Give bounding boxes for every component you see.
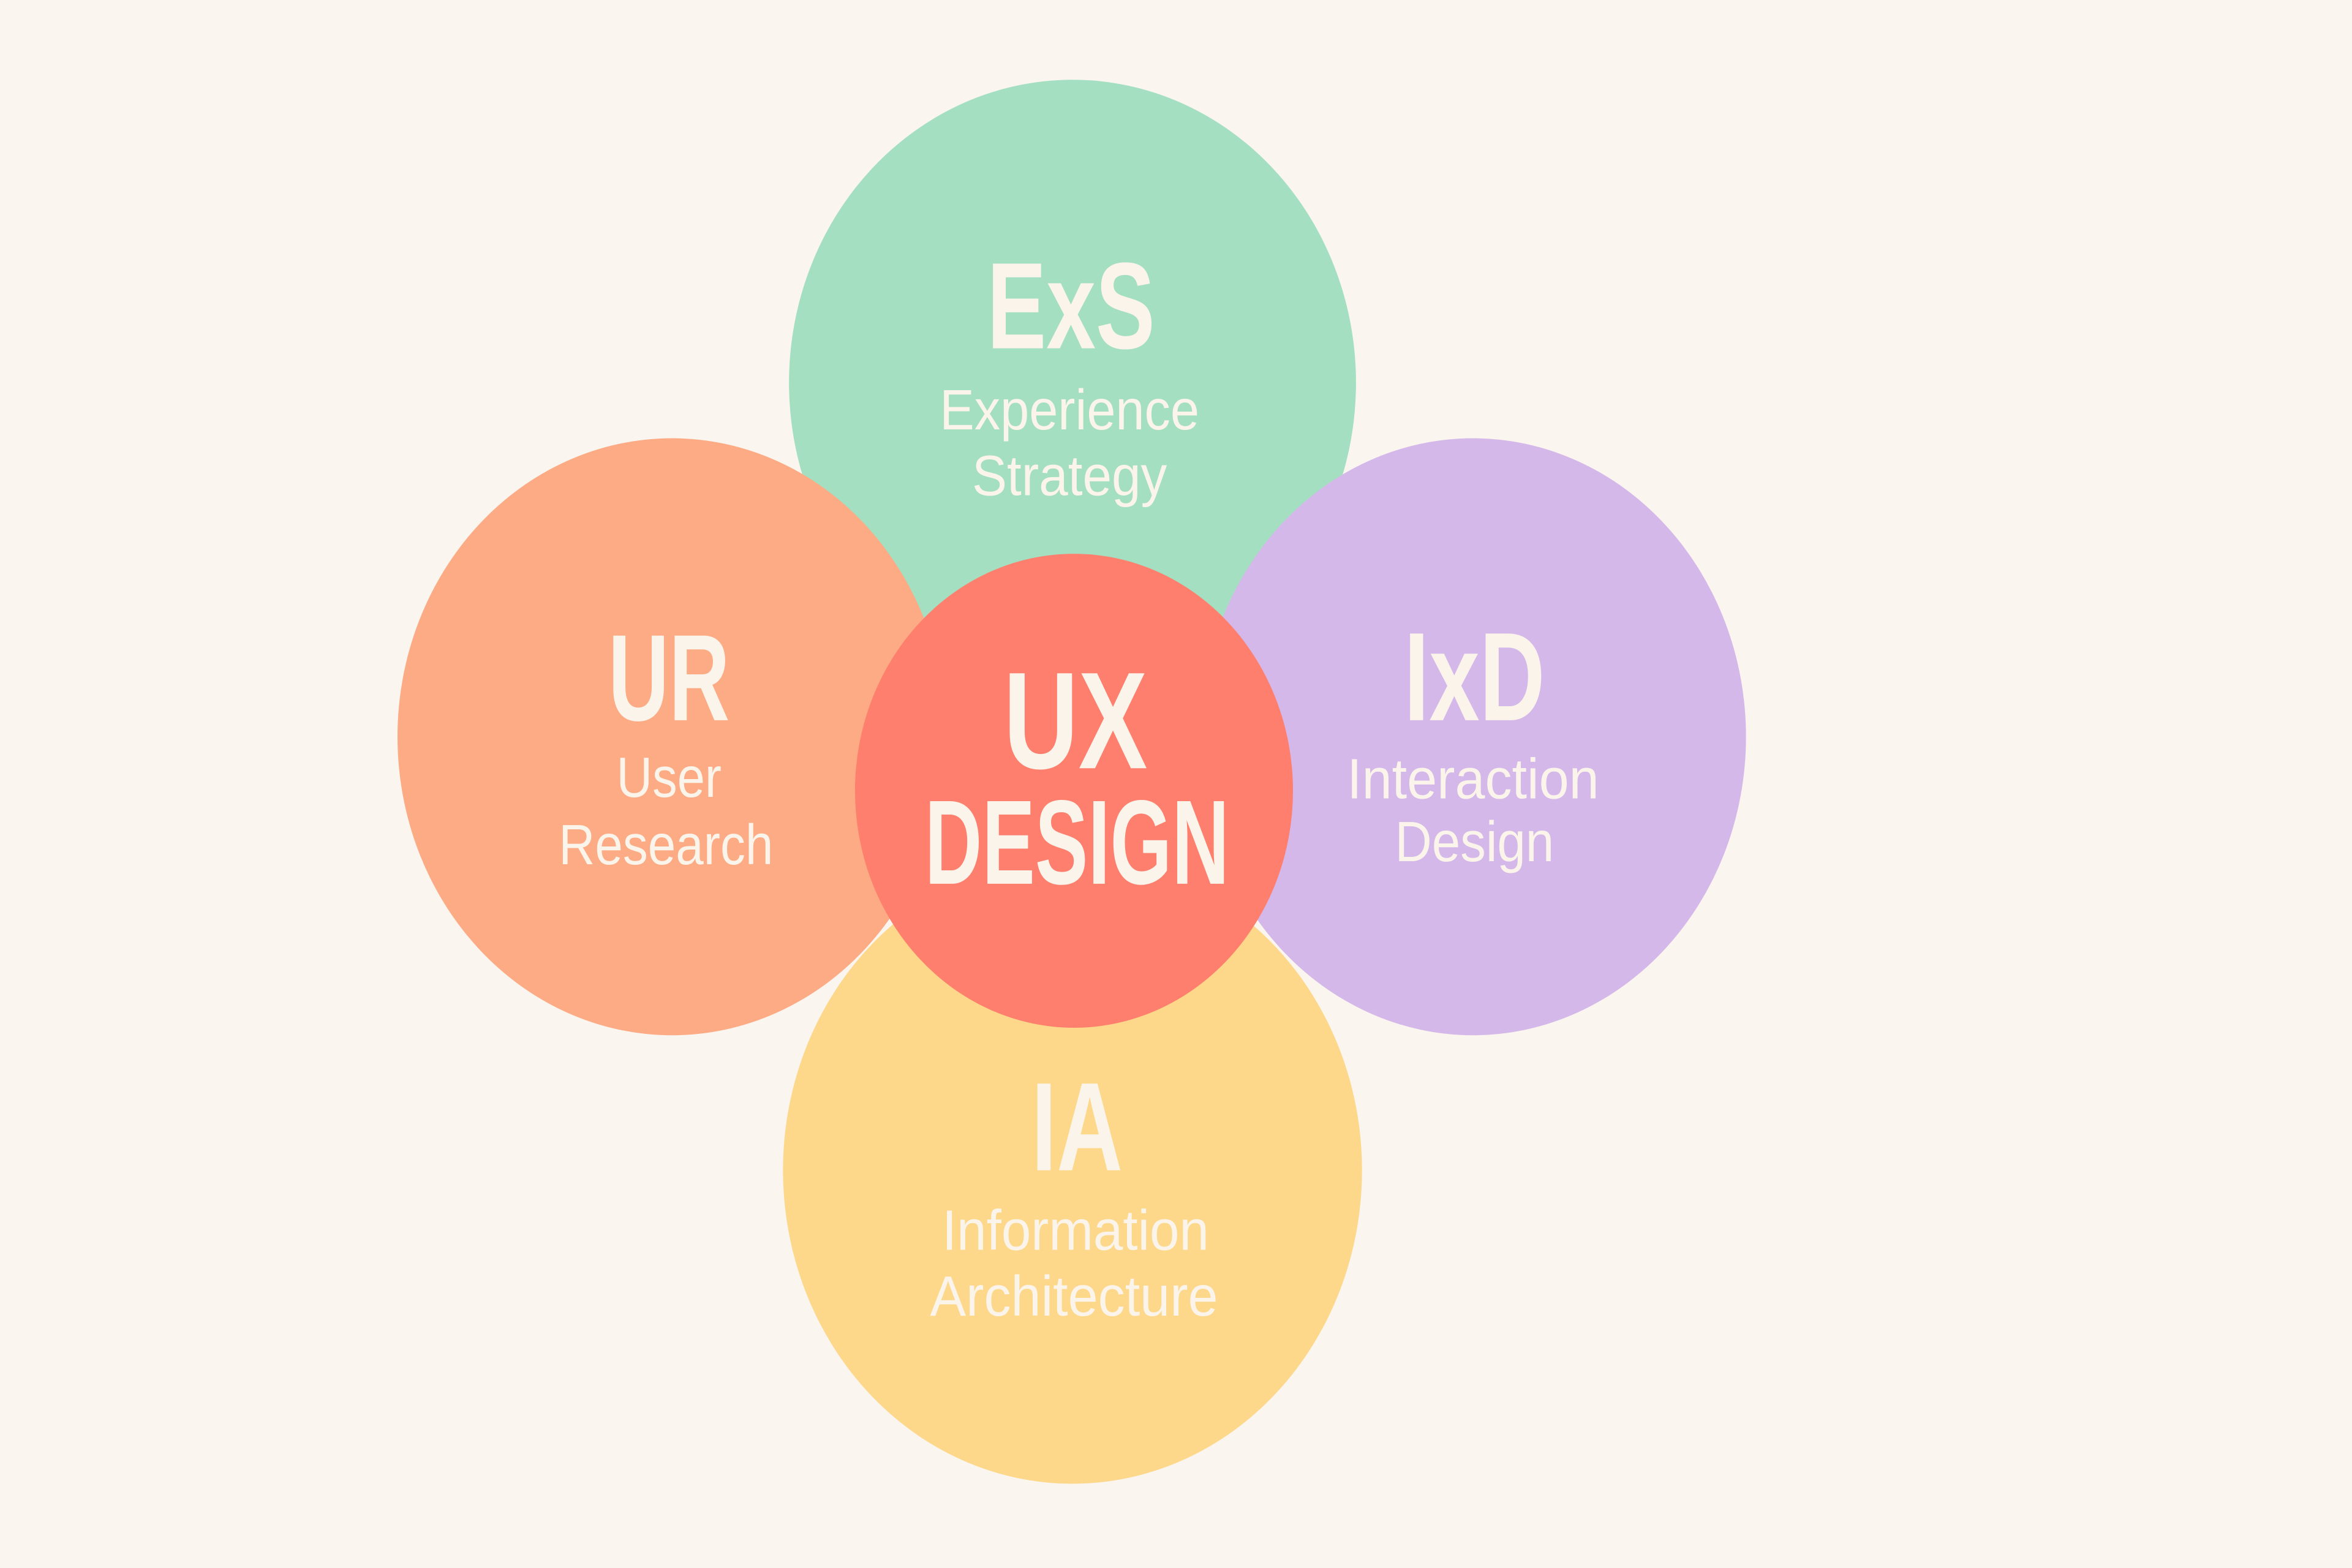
- circle: User Research: [398, 439, 946, 1035]
- circle: Experience Strategy: [789, 80, 1356, 686]
- label: UR: UR: [608, 609, 729, 747]
- text: Architecture: Architecture: [930, 1264, 1218, 1328]
- label: IA: IA: [1031, 1057, 1123, 1197]
- text: Design: Design: [1395, 810, 1554, 873]
- label: UX: UX: [1003, 643, 1147, 797]
- text: Strategy: Strategy: [972, 444, 1167, 508]
- text: User: User: [617, 745, 722, 809]
- circle: UX Design center: [855, 554, 1293, 1028]
- text: Experience Strategy: Experience: [940, 378, 1199, 442]
- label: ExS: ExS: [987, 237, 1155, 375]
- text: Research: Research: [559, 813, 773, 876]
- text: Information: Information: [942, 1198, 1209, 1262]
- label: IxD: IxD: [1404, 606, 1545, 747]
- circle: Interaction Design: [1200, 439, 1746, 1035]
- label: DESIGN: DESIGN: [925, 775, 1229, 910]
- circle: Information Architecture: [783, 857, 1362, 1483]
- text: Interaction: Interaction: [1347, 747, 1599, 810]
